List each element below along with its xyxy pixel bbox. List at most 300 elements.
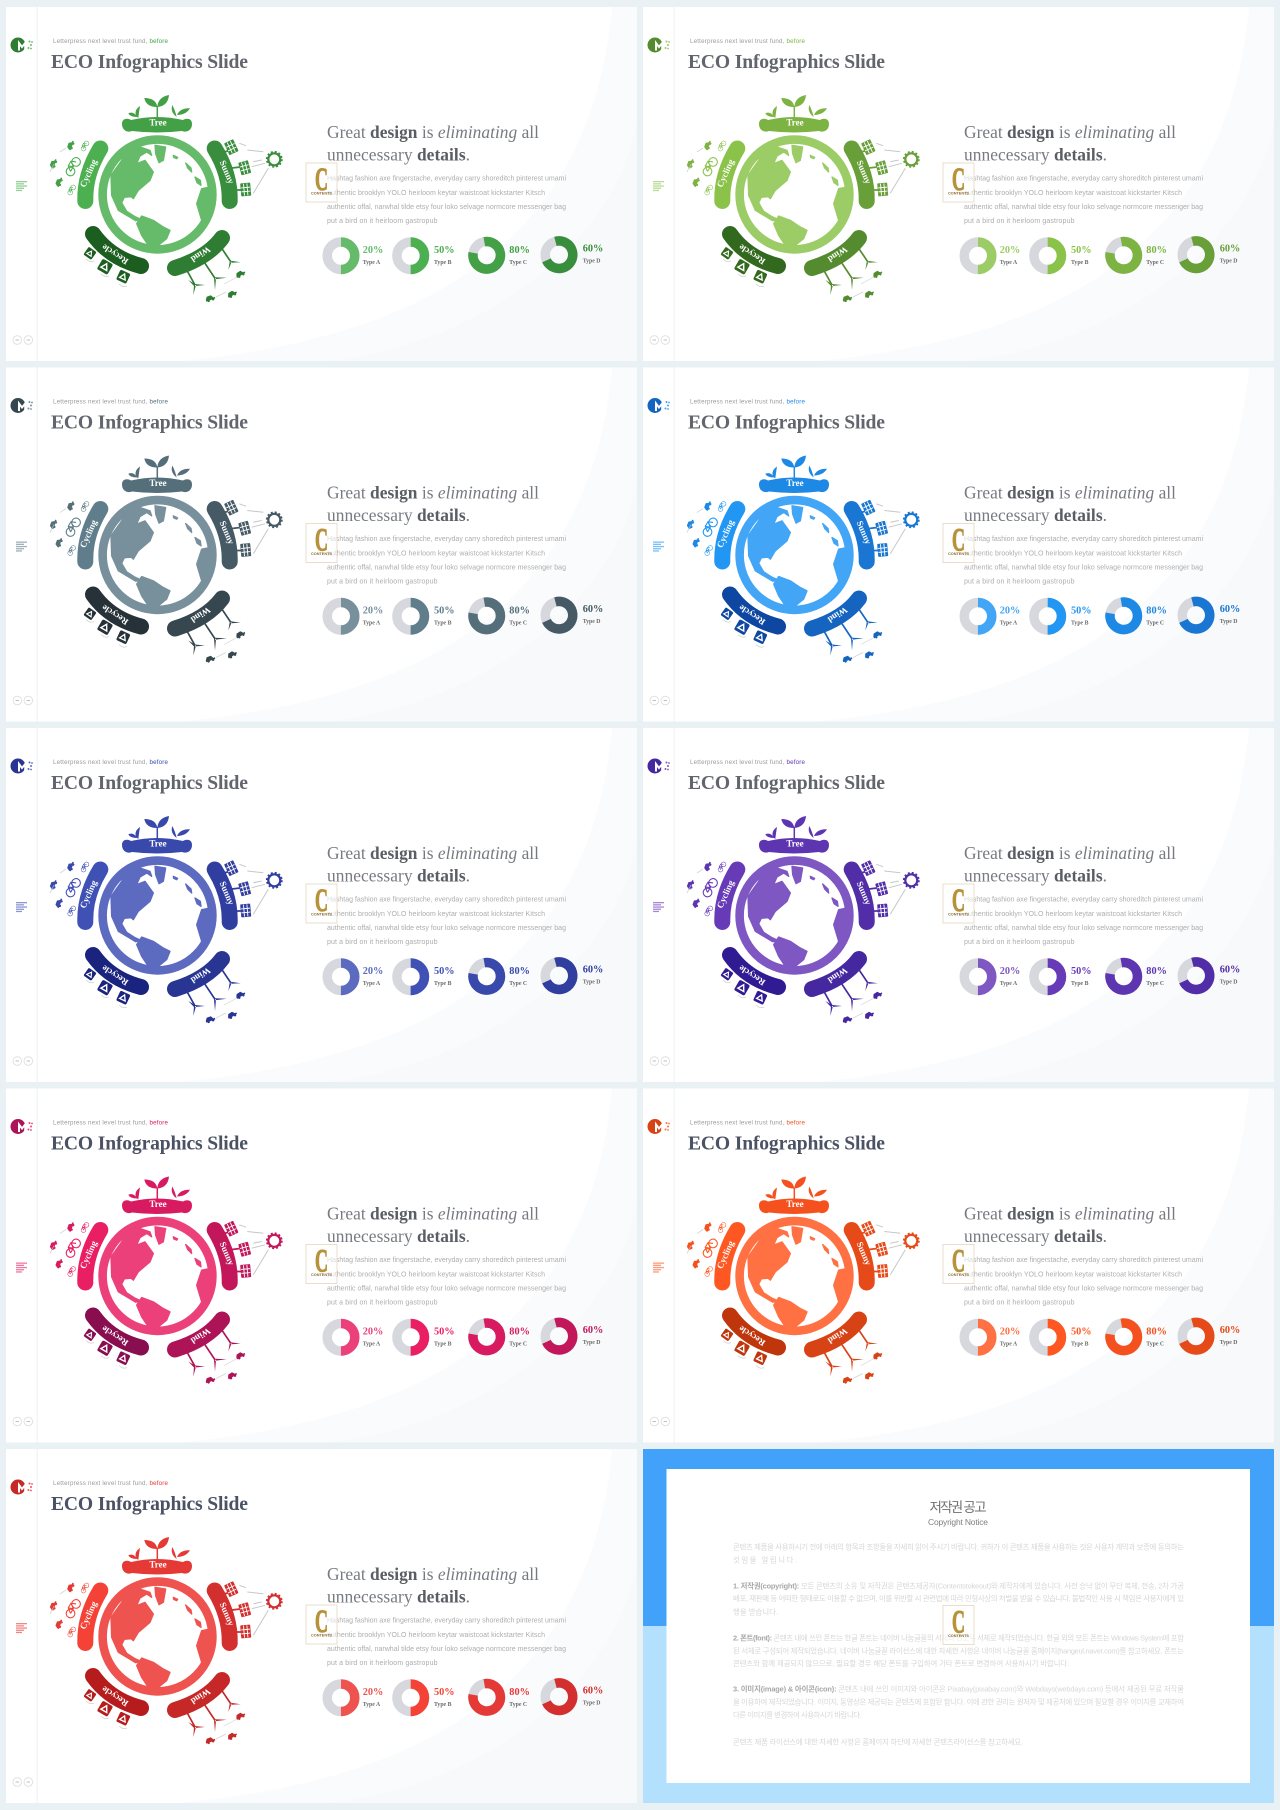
wind band: Wind bbox=[826, 1326, 849, 1346]
wind band bbox=[812, 598, 883, 663]
slide 1: green theme: unnecessary details. bbox=[327, 145, 470, 165]
tree band: Tree bbox=[149, 118, 167, 128]
watermark bbox=[943, 522, 974, 562]
tree band bbox=[122, 95, 192, 132]
body text: authentic brooklyn YOLO heirloom keytar waistcoat kickstarter Kitsch bbox=[964, 190, 1182, 197]
sunny band bbox=[215, 500, 282, 562]
recycle band: Recycle bbox=[737, 1324, 767, 1348]
recycle band bbox=[83, 955, 141, 1008]
donut charts: Type C bbox=[509, 981, 527, 987]
eco diagram bbox=[49, 1176, 282, 1384]
recycle band bbox=[720, 234, 778, 287]
donut charts: 60% bbox=[583, 1686, 603, 1697]
body text: Hashtag fashion axe fingerstache, everyday carry shoreditch pinterest umami bbox=[327, 176, 566, 182]
watermark: C bbox=[952, 883, 965, 919]
slide background bbox=[6, 1088, 637, 1442]
tree band bbox=[759, 95, 829, 132]
body text: authentic offal, narwhal tilde etsy four loko selvage normcore messenger bag bbox=[327, 204, 566, 211]
wind band bbox=[812, 959, 883, 1024]
eco diagram bbox=[686, 95, 919, 303]
donut charts: 60% bbox=[583, 244, 603, 255]
logo icon bbox=[648, 398, 670, 413]
slide 8: deep orange theme bbox=[643, 1088, 1274, 1442]
donut charts bbox=[964, 238, 1240, 272]
navigation arrows bbox=[650, 1417, 670, 1426]
kicker: Letterpress next level trust fund, before bbox=[690, 1120, 806, 1126]
slide 9: red theme: unnecessary details. bbox=[327, 1587, 470, 1607]
title: ECO Infographics Slide bbox=[688, 412, 885, 434]
donut charts: Type B bbox=[434, 1702, 452, 1708]
donut charts: Type B bbox=[434, 260, 452, 266]
donut charts: 80% bbox=[1146, 966, 1167, 977]
body text bbox=[964, 896, 1203, 946]
sidebar mini icon bbox=[653, 1262, 664, 1273]
watermark: CONTENTS bbox=[948, 1273, 969, 1277]
slide background bbox=[643, 1088, 1274, 1442]
watermark bbox=[943, 162, 974, 202]
notice body: 콘텐츠 제품을 사용하시기 전에 아래의 항목과 조항들을 자세히 읽어 주시기 바랍니다. 귀하가 이 콘텐츠 제품을 사용하는 것은 사용자 계약과 보증에 동의하는 bbox=[733, 1542, 1184, 1552]
slide background bbox=[6, 368, 637, 722]
body text bbox=[327, 896, 566, 946]
recycle band bbox=[83, 1676, 141, 1729]
sunny band bbox=[215, 139, 282, 201]
watermark bbox=[306, 522, 337, 562]
donut charts: Type B bbox=[1071, 981, 1089, 987]
sunny band bbox=[852, 139, 919, 201]
body text: put a bird on it heirloom gastropub bbox=[327, 218, 438, 225]
wind band bbox=[812, 1320, 883, 1384]
donut charts: Type D bbox=[1220, 980, 1237, 986]
donut charts: Type C bbox=[509, 620, 527, 626]
donut charts: Type A bbox=[363, 1342, 381, 1348]
notice body: 행을 받습니다. bbox=[733, 1608, 778, 1616]
donut charts: Type A bbox=[1000, 620, 1018, 626]
notice body: 2. 폰트(font): 콘텐츠 내에 쓰인 폰트는 한글 폰트는 네이버 나눔글꼴의 서체와 윈도우 서체로 제작되었습니다. 한글 외의 모든 폰트는 Windows System에 포함 bbox=[733, 1634, 1184, 1642]
kicker: Letterpress next level trust fund, before bbox=[53, 38, 169, 45]
navigation arrows bbox=[650, 696, 670, 705]
title: ECO Infographics Slide bbox=[688, 1134, 885, 1154]
slide 2: light green theme: unnecessary details. bbox=[964, 145, 1107, 165]
sidebar mini icon bbox=[16, 1623, 27, 1633]
recycle band bbox=[83, 234, 141, 287]
tree band: Tree bbox=[786, 478, 804, 488]
body text: Hashtag fashion axe fingerstache, everyday carry shoreditch pinterest umami bbox=[964, 536, 1203, 543]
donut charts: Type B bbox=[1071, 1342, 1089, 1348]
recycle band: Recycle bbox=[737, 603, 767, 627]
tree band bbox=[122, 456, 192, 493]
donut charts: 50% bbox=[434, 966, 455, 977]
tree band: Tree bbox=[786, 838, 804, 848]
navigation arrows bbox=[13, 1417, 33, 1426]
heading: Great design is eliminating all bbox=[327, 122, 539, 142]
donut charts: Type A bbox=[363, 1702, 381, 1708]
body text: put a bird on it heirloom gastropub bbox=[964, 578, 1075, 586]
navigation arrows bbox=[650, 1057, 670, 1065]
recycle band bbox=[720, 955, 778, 1008]
sidebar mini icon bbox=[653, 902, 664, 912]
cycling band: Cycling bbox=[78, 157, 99, 189]
watermark: C bbox=[952, 162, 965, 198]
slide 4: blue theme bbox=[643, 368, 1274, 722]
cycling band bbox=[686, 500, 737, 562]
slide background bbox=[6, 1449, 637, 1803]
donut charts: 20% bbox=[1000, 245, 1020, 256]
navigation arrows bbox=[650, 336, 670, 344]
body text: put a bird on it heirloom gastropub bbox=[964, 1300, 1075, 1306]
watermark bbox=[306, 162, 337, 202]
recycle band bbox=[83, 1316, 141, 1368]
globe bbox=[103, 500, 212, 610]
donut charts: Type D bbox=[583, 980, 600, 986]
body text bbox=[327, 1257, 566, 1306]
panel: copyright notice bbox=[643, 1449, 1274, 1803]
wind band bbox=[175, 959, 246, 1024]
watermark: CONTENTS bbox=[311, 912, 332, 916]
recycle band bbox=[720, 594, 778, 647]
navigation arrows bbox=[13, 1057, 33, 1065]
slide background bbox=[643, 7, 1274, 361]
sunny band: Sunny bbox=[218, 1601, 237, 1628]
slide 3: blue grey theme bbox=[6, 368, 637, 722]
recycle band: Recycle bbox=[737, 242, 767, 267]
kicker: Letterpress next level trust fund, before bbox=[690, 759, 806, 766]
body text: authentic offal, narwhal tilde etsy four loko selvage normcore messenger bag bbox=[964, 204, 1203, 211]
cycling band bbox=[686, 1221, 737, 1282]
logo icon bbox=[10, 758, 33, 774]
notice body: 콘텐츠 제품 라이선스에 대한 자세한 사항은 홈페이지 하단에 자세한 콘텐츠라이선스를 참고하세요. bbox=[733, 1738, 1023, 1746]
wind band: Wind bbox=[189, 244, 212, 264]
wind band bbox=[175, 238, 246, 303]
tree band bbox=[122, 1537, 192, 1574]
heading: Great design is eliminating all bbox=[964, 482, 1176, 502]
donut charts: 50% bbox=[1071, 966, 1092, 977]
donut charts: 60% bbox=[1220, 965, 1240, 976]
sidebar mini icon bbox=[16, 902, 27, 912]
globe bbox=[103, 1221, 212, 1331]
recycle band: Recycle bbox=[100, 1684, 130, 1709]
donut charts: Type D bbox=[583, 1340, 600, 1346]
heading: Great design is eliminating all bbox=[964, 1204, 1176, 1224]
tree band bbox=[759, 456, 829, 493]
watermark: CONTENTS bbox=[948, 912, 969, 916]
sunny band: Sunny bbox=[218, 880, 237, 907]
notice subtitle: Copyright Notice bbox=[928, 1517, 988, 1527]
donut charts bbox=[327, 959, 603, 993]
title: ECO Infographics Slide bbox=[51, 412, 248, 434]
body text: authentic offal, narwhal tilde etsy four loko selvage normcore messenger bag bbox=[327, 1646, 566, 1653]
donut charts: 80% bbox=[509, 245, 530, 256]
donut charts: Type D bbox=[1220, 1340, 1237, 1346]
watermark bbox=[306, 883, 337, 923]
wind band: Wind bbox=[826, 965, 849, 985]
slide 5: indigo theme bbox=[6, 728, 637, 1082]
donut charts: 50% bbox=[1071, 606, 1092, 616]
slide background bbox=[6, 728, 637, 1082]
notice body: 다른 이미지를 변경하여 사용하시기 바랍니다. bbox=[733, 1710, 862, 1720]
notice title: 저작권 공고 bbox=[930, 1500, 986, 1515]
donut charts: Type A bbox=[363, 620, 381, 626]
tree band: Tree bbox=[149, 838, 167, 848]
body text: Hashtag fashion axe fingerstache, everyday carry shoreditch pinterest umami bbox=[327, 1257, 566, 1264]
watermark: CONTENTS bbox=[948, 1634, 969, 1638]
sunny band: Sunny bbox=[218, 1240, 237, 1267]
body text: authentic offal, narwhal tilde etsy four loko selvage normcore messenger bag bbox=[327, 1286, 566, 1292]
donut charts: Type D bbox=[583, 619, 600, 625]
title: ECO Infographics Slide bbox=[51, 52, 248, 73]
wind band bbox=[175, 1680, 246, 1745]
logo icon bbox=[10, 1119, 33, 1134]
kicker: Letterpress next level trust fund, before bbox=[53, 1120, 169, 1126]
wind band: Wind bbox=[826, 244, 849, 264]
eco diagram bbox=[686, 816, 919, 1024]
slide 4: blue theme: unnecessary details. bbox=[964, 505, 1107, 525]
logo icon bbox=[648, 758, 670, 774]
eco diagram bbox=[49, 95, 282, 303]
title: ECO Infographics Slide bbox=[688, 773, 885, 794]
sidebar mini icon bbox=[653, 181, 664, 191]
cycling band bbox=[49, 1582, 100, 1643]
cycling band: Cycling bbox=[78, 1599, 99, 1631]
logo icon bbox=[648, 1119, 670, 1134]
tree band: Tree bbox=[149, 478, 167, 488]
slide 5: indigo theme: unnecessary details. bbox=[327, 866, 470, 886]
wind band: Wind bbox=[189, 1686, 212, 1706]
heading: Great design is eliminating all bbox=[327, 1564, 539, 1584]
eco diagram bbox=[686, 1176, 919, 1384]
kicker: Letterpress next level trust fund, before bbox=[53, 398, 169, 406]
donut charts: 20% bbox=[363, 1687, 383, 1698]
watermark: CONTENTS bbox=[948, 552, 969, 556]
tree band bbox=[122, 816, 192, 854]
watermark: CONTENTS bbox=[311, 192, 332, 196]
donut charts: 20% bbox=[1000, 966, 1020, 977]
navigation arrows bbox=[13, 336, 33, 344]
notice body: 을 이용하여 제작되었습니다. 이미지, 동영상은 제공되는 콘텐츠에 포함된 합니다. 이에 관한 권리는 원저자 및 제공처에 있으며 필요할 경우 이미지를 교체하여 bbox=[733, 1698, 1184, 1706]
cycling band bbox=[686, 140, 737, 201]
cycling band bbox=[686, 861, 737, 922]
heading: Great design is eliminating all bbox=[964, 122, 1176, 142]
donut charts: 80% bbox=[1146, 1326, 1167, 1338]
body text: put a bird on it heirloom gastropub bbox=[327, 1660, 438, 1667]
donut charts: 20% bbox=[363, 606, 383, 616]
watermark bbox=[306, 1244, 337, 1284]
wind band bbox=[175, 598, 246, 663]
kicker: Letterpress next level trust fund, before bbox=[690, 38, 806, 45]
slide 3: blue grey theme: unnecessary details. bbox=[327, 505, 470, 525]
donut charts: Type C bbox=[509, 260, 527, 266]
body text: authentic offal, narwhal tilde etsy four loko selvage normcore messenger bag bbox=[327, 925, 566, 932]
eco diagram bbox=[686, 456, 919, 663]
body text: Hashtag fashion axe fingerstache, everyday carry shoreditch pinterest umami bbox=[327, 536, 566, 543]
watermark: C bbox=[315, 162, 328, 198]
recycle band: Recycle bbox=[100, 1324, 130, 1348]
sunny band bbox=[852, 500, 919, 562]
globe bbox=[103, 861, 212, 970]
donut charts: Type C bbox=[1146, 260, 1164, 266]
slide 1: green theme bbox=[6, 7, 637, 361]
cycling band: Cycling bbox=[715, 1239, 736, 1270]
donut charts bbox=[964, 1319, 1240, 1353]
sidebar mini icon bbox=[16, 1262, 27, 1273]
wind band bbox=[175, 1320, 246, 1384]
blue frame upper bbox=[643, 1449, 1274, 1626]
globe bbox=[740, 861, 849, 970]
donut charts: Type B bbox=[1071, 620, 1089, 626]
navigation arrows bbox=[13, 1778, 33, 1786]
donut charts bbox=[327, 238, 603, 272]
notice body: 1. 저작권(copyright): 모든 콘텐츠의 소유 및 저작권은 콘텐츠제공자(Contentstokeout)와 제작자에게 있습니다. 사전 승낙 없이 무단 복제, 전송, 2차 가공 bbox=[733, 1582, 1184, 1590]
donut charts: 50% bbox=[434, 1326, 455, 1338]
body text: Hashtag fashion axe fingerstache, everyday carry shoreditch pinterest umami bbox=[327, 896, 566, 904]
watermark bbox=[306, 1604, 337, 1644]
body text bbox=[964, 1257, 1203, 1306]
donut charts: Type C bbox=[509, 1342, 527, 1348]
donut charts: 20% bbox=[363, 966, 383, 977]
globe bbox=[740, 140, 849, 249]
recycle band: Recycle bbox=[100, 242, 130, 267]
slide 2: light green theme bbox=[643, 7, 1274, 361]
body text: authentic brooklyn YOLO heirloom keytar waistcoat kickstarter Kitsch bbox=[327, 190, 545, 197]
cycling band: Cycling bbox=[715, 518, 736, 549]
sunny band: Sunny bbox=[855, 159, 874, 186]
donut charts: 80% bbox=[509, 966, 530, 977]
donut charts: Type B bbox=[434, 981, 452, 987]
wind band: Wind bbox=[826, 605, 849, 625]
body text: authentic brooklyn YOLO heirloom keytar waistcoat kickstarter Kitsch bbox=[964, 911, 1182, 918]
cycling band bbox=[49, 861, 100, 922]
body text: authentic offal, narwhal tilde etsy four loko selvage normcore messenger bag bbox=[964, 925, 1203, 932]
donut charts: 80% bbox=[1146, 245, 1167, 256]
title: ECO Infographics Slide bbox=[51, 1134, 248, 1154]
globe bbox=[740, 500, 849, 610]
body text bbox=[964, 536, 1203, 586]
title: ECO Infographics Slide bbox=[688, 52, 885, 73]
donut charts: 60% bbox=[583, 604, 603, 615]
notice body: 배포, 재판매 등 어떠한 형태로도 이용할 수 없으며, 이를 위반할 시 관련법에 따라 민형사상의 처벌을 받을 수 있습니다. 불법적인 사용 시 책임은 사용자에게 있 bbox=[733, 1594, 1184, 1603]
watermark: CONTENTS bbox=[311, 1634, 332, 1638]
watermark: CONTENTS bbox=[311, 1273, 332, 1277]
donut charts: 50% bbox=[1071, 1326, 1092, 1338]
slide 7: pink theme: unnecessary details. bbox=[327, 1226, 470, 1246]
donut charts: Type C bbox=[509, 1702, 527, 1708]
white sheet bbox=[666, 1469, 1250, 1783]
sidebar mini icon bbox=[16, 542, 27, 552]
sidebar mini icon bbox=[16, 181, 27, 191]
body text: put a bird on it heirloom gastropub bbox=[964, 939, 1075, 946]
wind band: Wind bbox=[189, 965, 212, 985]
cycling band bbox=[49, 140, 100, 201]
sunny band: Sunny bbox=[218, 159, 237, 186]
watermark: C bbox=[315, 1244, 328, 1280]
body text bbox=[327, 536, 566, 586]
body text: authentic brooklyn YOLO heirloom keytar waistcoat kickstarter Kitsch bbox=[327, 1272, 545, 1278]
body text: authentic offal, narwhal tilde etsy four loko selvage normcore messenger bag bbox=[327, 564, 566, 572]
watermark: C bbox=[952, 522, 965, 558]
logo icon bbox=[10, 38, 33, 52]
tree band bbox=[759, 1176, 829, 1214]
tree band bbox=[759, 816, 829, 854]
logo icon bbox=[10, 398, 33, 413]
title: ECO Infographics Slide bbox=[51, 773, 248, 794]
cycling band: Cycling bbox=[78, 878, 99, 910]
logo icon bbox=[10, 1480, 33, 1494]
donut charts: 50% bbox=[1071, 245, 1092, 256]
donut charts: Type C bbox=[1146, 981, 1164, 987]
globe bbox=[103, 1582, 212, 1691]
body text bbox=[964, 176, 1203, 225]
donut charts: Type D bbox=[583, 259, 600, 265]
sidebar mini icon bbox=[653, 542, 664, 552]
wind band: Wind bbox=[189, 1326, 212, 1346]
donut charts: 80% bbox=[509, 1326, 530, 1338]
body text: put a bird on it heirloom gastropub bbox=[327, 939, 438, 946]
donut charts: Type A bbox=[1000, 1342, 1018, 1348]
donut charts: Type D bbox=[1220, 619, 1237, 625]
donut charts: 60% bbox=[1220, 1325, 1240, 1336]
body text: authentic brooklyn YOLO heirloom keytar waistcoat kickstarter Kitsch bbox=[327, 911, 545, 918]
sunny band: Sunny bbox=[855, 1240, 874, 1267]
sunny band bbox=[852, 1221, 919, 1282]
kicker: Letterpress next level trust fund, before bbox=[53, 759, 169, 766]
logo icon bbox=[648, 38, 670, 52]
donut charts: 20% bbox=[363, 245, 383, 256]
watermark: C bbox=[315, 522, 328, 558]
slide background bbox=[643, 368, 1274, 722]
body text: put a bird on it heirloom gastropub bbox=[964, 218, 1075, 225]
cycling band: Cycling bbox=[78, 518, 99, 549]
body text: Hashtag fashion axe fingerstache, everyday carry shoreditch pinterest umami bbox=[964, 1257, 1203, 1264]
donut charts: Type C bbox=[1146, 1342, 1164, 1348]
globe bbox=[103, 140, 212, 249]
notice body: 3. 이미지(image) & 아이콘(icon): 콘텐츠 내에 쓰인 이미지와 아이콘은 Pixabay(pixabay.com)와 Webdays(webdays.com) 등에서 제공된 무료 저작물 bbox=[733, 1684, 1184, 1694]
body text bbox=[327, 176, 566, 225]
notice body: 된 서체로 구성되어 제작되었습니다. 네이버 나눔글꼴 라이선스에 대한 자세한 사항은 네이버 나눔글꼴 홈페이지(hangeul.naver.com)를 참고하세요. 폰트는 bbox=[733, 1646, 1184, 1656]
eco diagram bbox=[49, 1537, 282, 1745]
donut charts: 80% bbox=[509, 1687, 530, 1698]
title: ECO Infographics Slide bbox=[51, 1494, 248, 1515]
globe bbox=[740, 1221, 849, 1331]
recycle band: Recycle bbox=[100, 963, 130, 988]
watermark: C bbox=[952, 1244, 965, 1280]
slide 9: red theme bbox=[6, 1449, 637, 1803]
donut charts: Type D bbox=[1220, 259, 1237, 265]
donut charts: Type C bbox=[1146, 620, 1164, 626]
slide 6: deep purple theme: unnecessary details. bbox=[964, 866, 1107, 886]
cycling band: Cycling bbox=[715, 878, 736, 910]
tree band: Tree bbox=[786, 1199, 804, 1209]
donut charts: 60% bbox=[1220, 244, 1240, 255]
sunny band: Sunny bbox=[855, 880, 874, 907]
watermark: C bbox=[315, 883, 328, 919]
body text: put a bird on it heirloom gastropub bbox=[327, 578, 438, 586]
donut charts: Type B bbox=[434, 1342, 452, 1348]
cycling band: Cycling bbox=[78, 1239, 99, 1270]
donut charts bbox=[327, 598, 603, 632]
donut charts: 50% bbox=[434, 606, 455, 616]
watermark bbox=[943, 883, 974, 923]
sunny band bbox=[215, 1221, 282, 1282]
tree band bbox=[122, 1176, 192, 1214]
watermark bbox=[943, 1244, 974, 1284]
tree band: Tree bbox=[149, 1199, 167, 1209]
tree band: Tree bbox=[149, 1560, 167, 1570]
notice body bbox=[733, 1542, 1184, 1746]
body text: authentic brooklyn YOLO heirloom keytar waistcoat kickstarter Kitsch bbox=[327, 1632, 545, 1639]
donut charts: 60% bbox=[583, 965, 603, 976]
donut charts bbox=[327, 1680, 603, 1714]
donut charts: 80% bbox=[509, 606, 530, 616]
slide 6: deep purple theme bbox=[643, 728, 1274, 1082]
